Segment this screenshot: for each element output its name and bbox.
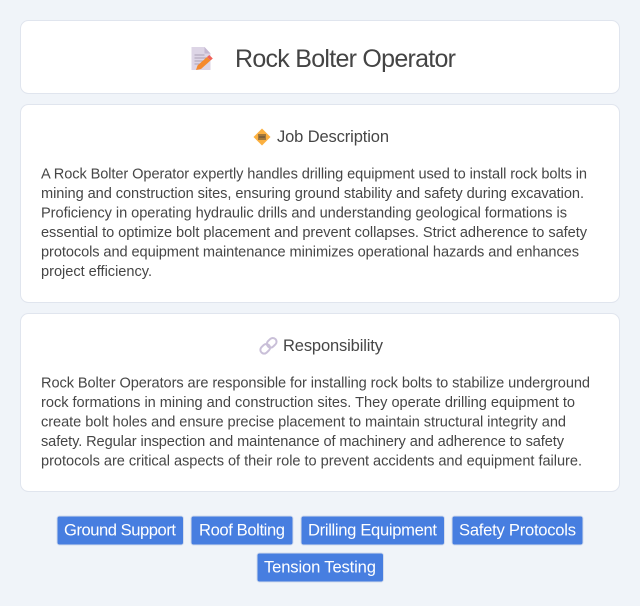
tag: safety protocols [452, 516, 583, 545]
job description text: Proficiency in operating hydraulic drills and understanding geological formations is [41, 206, 567, 222]
tag: tension testing [257, 553, 384, 582]
job description text: protocols and equipment maintenance minimizes operational hazards and enhances [41, 244, 579, 260]
tag: ground support [57, 516, 184, 545]
responsibility text: Rock Bolter Operators are responsible for installing rock bolts to stabilize underground [41, 376, 590, 392]
icon: road sign diamond [254, 128, 270, 146]
job description text: A Rock Bolter Operator expertly handles drilling equipment used to install rock bolts in [41, 166, 587, 182]
job description text: project efficiency. [41, 264, 152, 280]
heading: job description: Job Description [277, 128, 389, 146]
responsibility text: rock formations in mining and construction sites. They operate drilling equipment to [41, 395, 575, 411]
responsibility text: safety. Regular inspection and maintenance of machinery and adherence to safety [41, 434, 565, 450]
icon: document with pencil [192, 47, 213, 70]
responsibility text: protocols are critical aspects of their role to prevent accidents and equipment failure. [41, 454, 582, 470]
job description text: essential to optimize bolt placement and prevent collapses. Strict adherence to safety [41, 225, 588, 241]
tag: roof bolting [191, 516, 293, 545]
panel: title [20, 20, 620, 94]
job description text: mining and construction sites, ensuring ground stability and safety during excavation. [41, 186, 584, 202]
responsibility text: create bolt holes and ensure precise placement to maintain structural integrity and [41, 414, 566, 430]
panel: job description [20, 104, 620, 302]
title text: Rock Bolter Operator [235, 45, 456, 73]
heading: responsibility: Responsibility [283, 337, 384, 355]
responsibility text [41, 376, 590, 470]
tag: ground support: Ground Support [64, 520, 176, 540]
tag: tension testing: Tension Testing [264, 558, 376, 576]
icon: chain link [259, 336, 278, 355]
tag: safety protocols: Safety Protocols [459, 520, 576, 540]
job description text [41, 166, 588, 280]
tag: roof bolting: Roof Bolting [199, 520, 285, 540]
tag: drilling equipment: Drilling Equipment [308, 520, 437, 540]
panel: responsibility [20, 314, 620, 492]
tag: drilling equipment [301, 516, 444, 545]
